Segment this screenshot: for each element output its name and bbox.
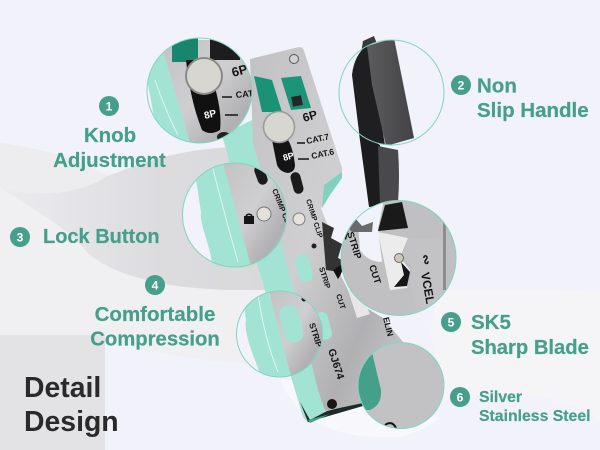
circle 1: knob detail: 6P: [230, 61, 249, 80]
plate text: [304, 198, 395, 381]
label 1: knob adjustment: 1: [106, 100, 113, 114]
circle 2: handle detail: [339, 38, 444, 146]
plate text: CUT: [334, 293, 348, 311]
circle 5: blade detail: STRIP: [344, 231, 363, 261]
circle 5: blade detail: VCEL: [418, 271, 437, 305]
plate text: ELIN: [381, 316, 395, 337]
label 6: silver stainless steel: Silver: [479, 389, 522, 406]
steel plate: [250, 47, 405, 411]
label 5: sk5 sharp blade: [441, 311, 589, 359]
circle 3: lock detail: [182, 162, 287, 268]
label 4: comfortable compression: 4: [152, 278, 159, 292]
label 2: non slip handle: Slip Handle: [477, 99, 589, 122]
jagged gear cutout: [322, 222, 346, 272]
mint frame: [222, 120, 325, 423]
6P label: 6P: [301, 107, 319, 125]
title: Detail: [24, 372, 101, 404]
label 1: knob adjustment: Adjustment: [53, 149, 166, 172]
tool body: [222, 47, 405, 423]
plate text: STRIP: [317, 266, 332, 290]
circle 5: blade detail: [338, 200, 456, 320]
title: [24, 372, 119, 438]
plate text: CRIMP CLIP: [304, 198, 323, 239]
slot: [289, 171, 305, 195]
screw: [290, 54, 298, 64]
plate text: GJ674: [325, 347, 346, 381]
label 5: sk5 sharp blade: SK5: [471, 311, 511, 334]
circle 1: knob detail: [146, 38, 252, 144]
circle 1: knob detail: 8P: [203, 108, 218, 122]
rivet: [293, 213, 305, 225]
circle 4: oval detail: [236, 288, 325, 380]
label 4: comfortable compression: [90, 275, 220, 350]
circle 5: blade detail: CUT: [366, 264, 383, 286]
label 2: non slip handle: Non: [477, 74, 517, 98]
circle 4: oval detail: STRIP: [307, 322, 324, 349]
handle: [359, 36, 399, 207]
CAT labels: CAT.7: [305, 131, 330, 146]
label 2: non slip handle: [451, 74, 589, 122]
CAT labels: [297, 131, 335, 161]
label 2: non slip handle: 2: [458, 78, 465, 92]
CAT labels: CAT.6: [310, 146, 335, 161]
knob: [271, 132, 295, 173]
label 5: sk5 sharp blade: 5: [448, 316, 455, 330]
label 1: knob adjustment: [53, 96, 166, 172]
label 3: lock button: 3: [17, 230, 24, 244]
circle 1: knob detail: CAT: [235, 88, 254, 100]
RJ ports: [254, 76, 282, 112]
title: Design: [24, 406, 119, 438]
label 1: knob adjustment: Knob: [84, 124, 136, 147]
mint oval: [294, 253, 314, 283]
label 6: silver stainless steel: [450, 387, 591, 425]
circle 5: blade detail: ∾: [418, 253, 435, 266]
label 4: comfortable compression: Comfortable: [95, 303, 215, 326]
label 6: silver stainless steel: Stainless Steel: [479, 408, 591, 425]
label 3: lock button: Lock Button: [43, 226, 160, 248]
8P label: 8P: [282, 150, 295, 163]
label 6: silver stainless steel: 6: [457, 390, 464, 404]
circle 3: lock detail: CRIMP CLIP: [270, 187, 295, 231]
circle 6: steel detail: [355, 340, 444, 428]
label 5: sk5 sharp blade: Sharp Blade: [471, 337, 589, 359]
label 4: comfortable compression: Compression: [90, 328, 220, 350]
